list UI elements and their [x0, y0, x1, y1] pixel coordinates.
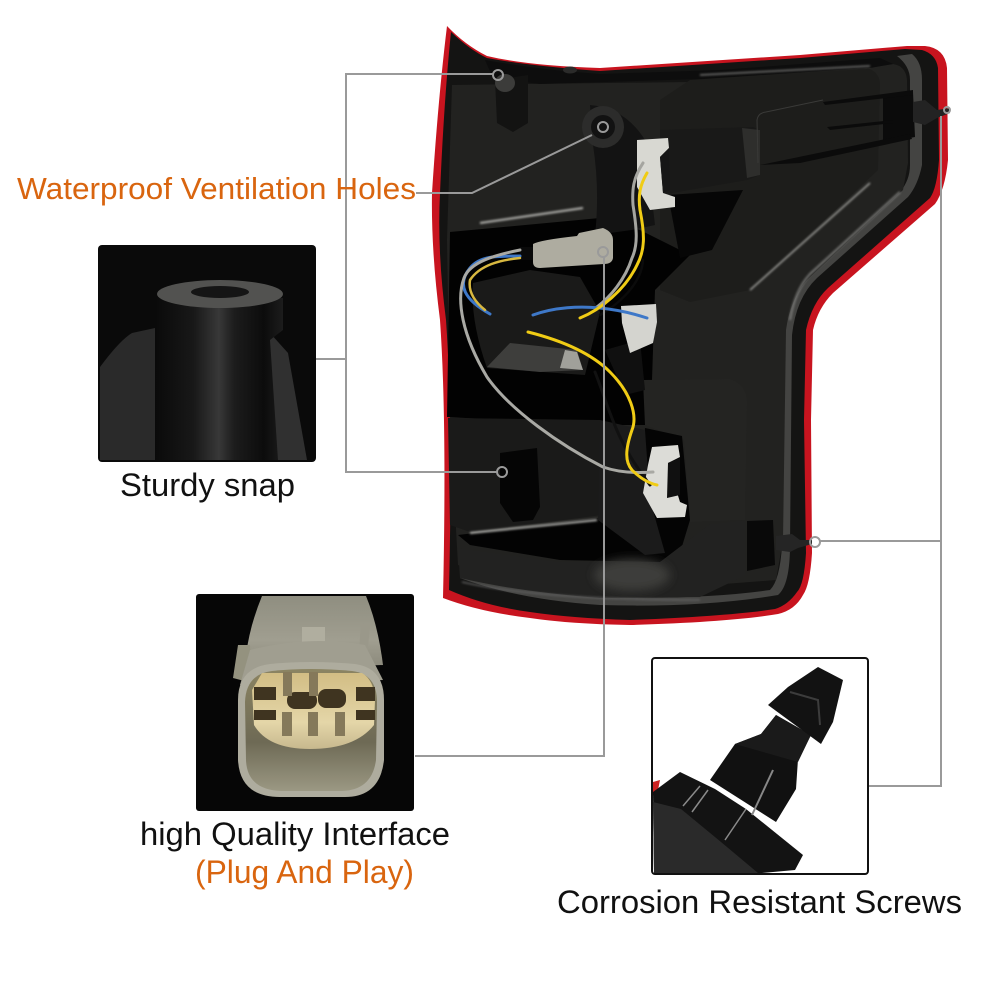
central black recess [447, 218, 690, 425]
right ear [358, 623, 370, 670]
shaft neck shade [735, 715, 811, 762]
connector well [245, 669, 377, 791]
connector back [245, 596, 383, 670]
upper right screw [913, 100, 950, 125]
label: sturdy snap: Sturdy snap [120, 467, 295, 503]
nut notches [683, 786, 746, 840]
socket recess [640, 428, 690, 560]
main raised body [447, 64, 908, 592]
felt base [653, 802, 758, 873]
wires [461, 163, 657, 485]
bottom mounting snap [500, 448, 540, 522]
inner raised panel [660, 68, 880, 302]
right centre panel [643, 379, 747, 522]
panel: connector interface photo [196, 594, 414, 811]
screw shaft [710, 715, 811, 822]
lower black recess [458, 500, 684, 562]
middle white socket [621, 304, 657, 353]
bottom panel [458, 520, 746, 598]
thin outline box [757, 100, 823, 163]
red housing outline [432, 26, 948, 625]
snap right fin [265, 333, 307, 460]
wrap bright patch [560, 350, 583, 370]
left ear [233, 645, 252, 683]
ventilation hole [591, 115, 615, 139]
connector collar [240, 641, 383, 685]
lower-left panel [448, 418, 602, 532]
leader lines [316, 70, 950, 786]
upper right bracket and ribs [760, 90, 915, 165]
label: plug and play: (Plug And Play) [195, 854, 414, 890]
tail light assembly [432, 26, 950, 625]
clip tab [302, 627, 325, 647]
ventilation hole flange [582, 106, 624, 148]
top dark stripe [485, 58, 893, 84]
heading: waterproof ventilation holes: Waterproof Ventilation Holes [17, 171, 416, 206]
block on upper right [660, 127, 760, 195]
cream contact block [252, 673, 375, 749]
grey side band [460, 54, 922, 606]
top white socket [637, 138, 675, 210]
snap bore [191, 286, 249, 298]
bottom reflection [594, 559, 670, 591]
bottom white socket [643, 445, 687, 518]
panel: sturdy snap photo [98, 245, 316, 462]
connector tail [520, 247, 533, 260]
grey connector [533, 228, 613, 268]
top mounting snap [495, 75, 528, 132]
middle ribbed socket [605, 340, 645, 395]
black housing body [439, 32, 939, 620]
slots and pins [254, 672, 375, 736]
label: corrosion resistant screws: Corrosion Resistant Screws [557, 884, 962, 920]
red background bits [653, 780, 660, 795]
label: high quality interface: high Quality Interface [140, 816, 450, 852]
connector front rim [238, 662, 384, 797]
wire bundle wrap [473, 270, 600, 375]
block side face [742, 128, 760, 178]
snap left fin [100, 328, 155, 460]
top ribbed socket [590, 105, 655, 235]
snap rim [157, 280, 283, 308]
dark recess below block [668, 190, 743, 258]
top socket gap [660, 148, 670, 193]
wrap lower reflection [487, 343, 583, 372]
top snap post [495, 74, 515, 92]
top small oval [563, 66, 577, 74]
lower right screw [776, 534, 812, 552]
panel: screw photo [652, 658, 868, 874]
shaft highlight [752, 770, 773, 815]
screw tip [768, 667, 843, 744]
bottom ribbed socket [598, 420, 665, 555]
bottom socket centre [667, 458, 680, 498]
tip highlight [790, 692, 820, 725]
hex nut [653, 772, 803, 873]
lower right bracket [747, 520, 775, 571]
snap post body [155, 298, 283, 460]
highlights [462, 66, 900, 600]
